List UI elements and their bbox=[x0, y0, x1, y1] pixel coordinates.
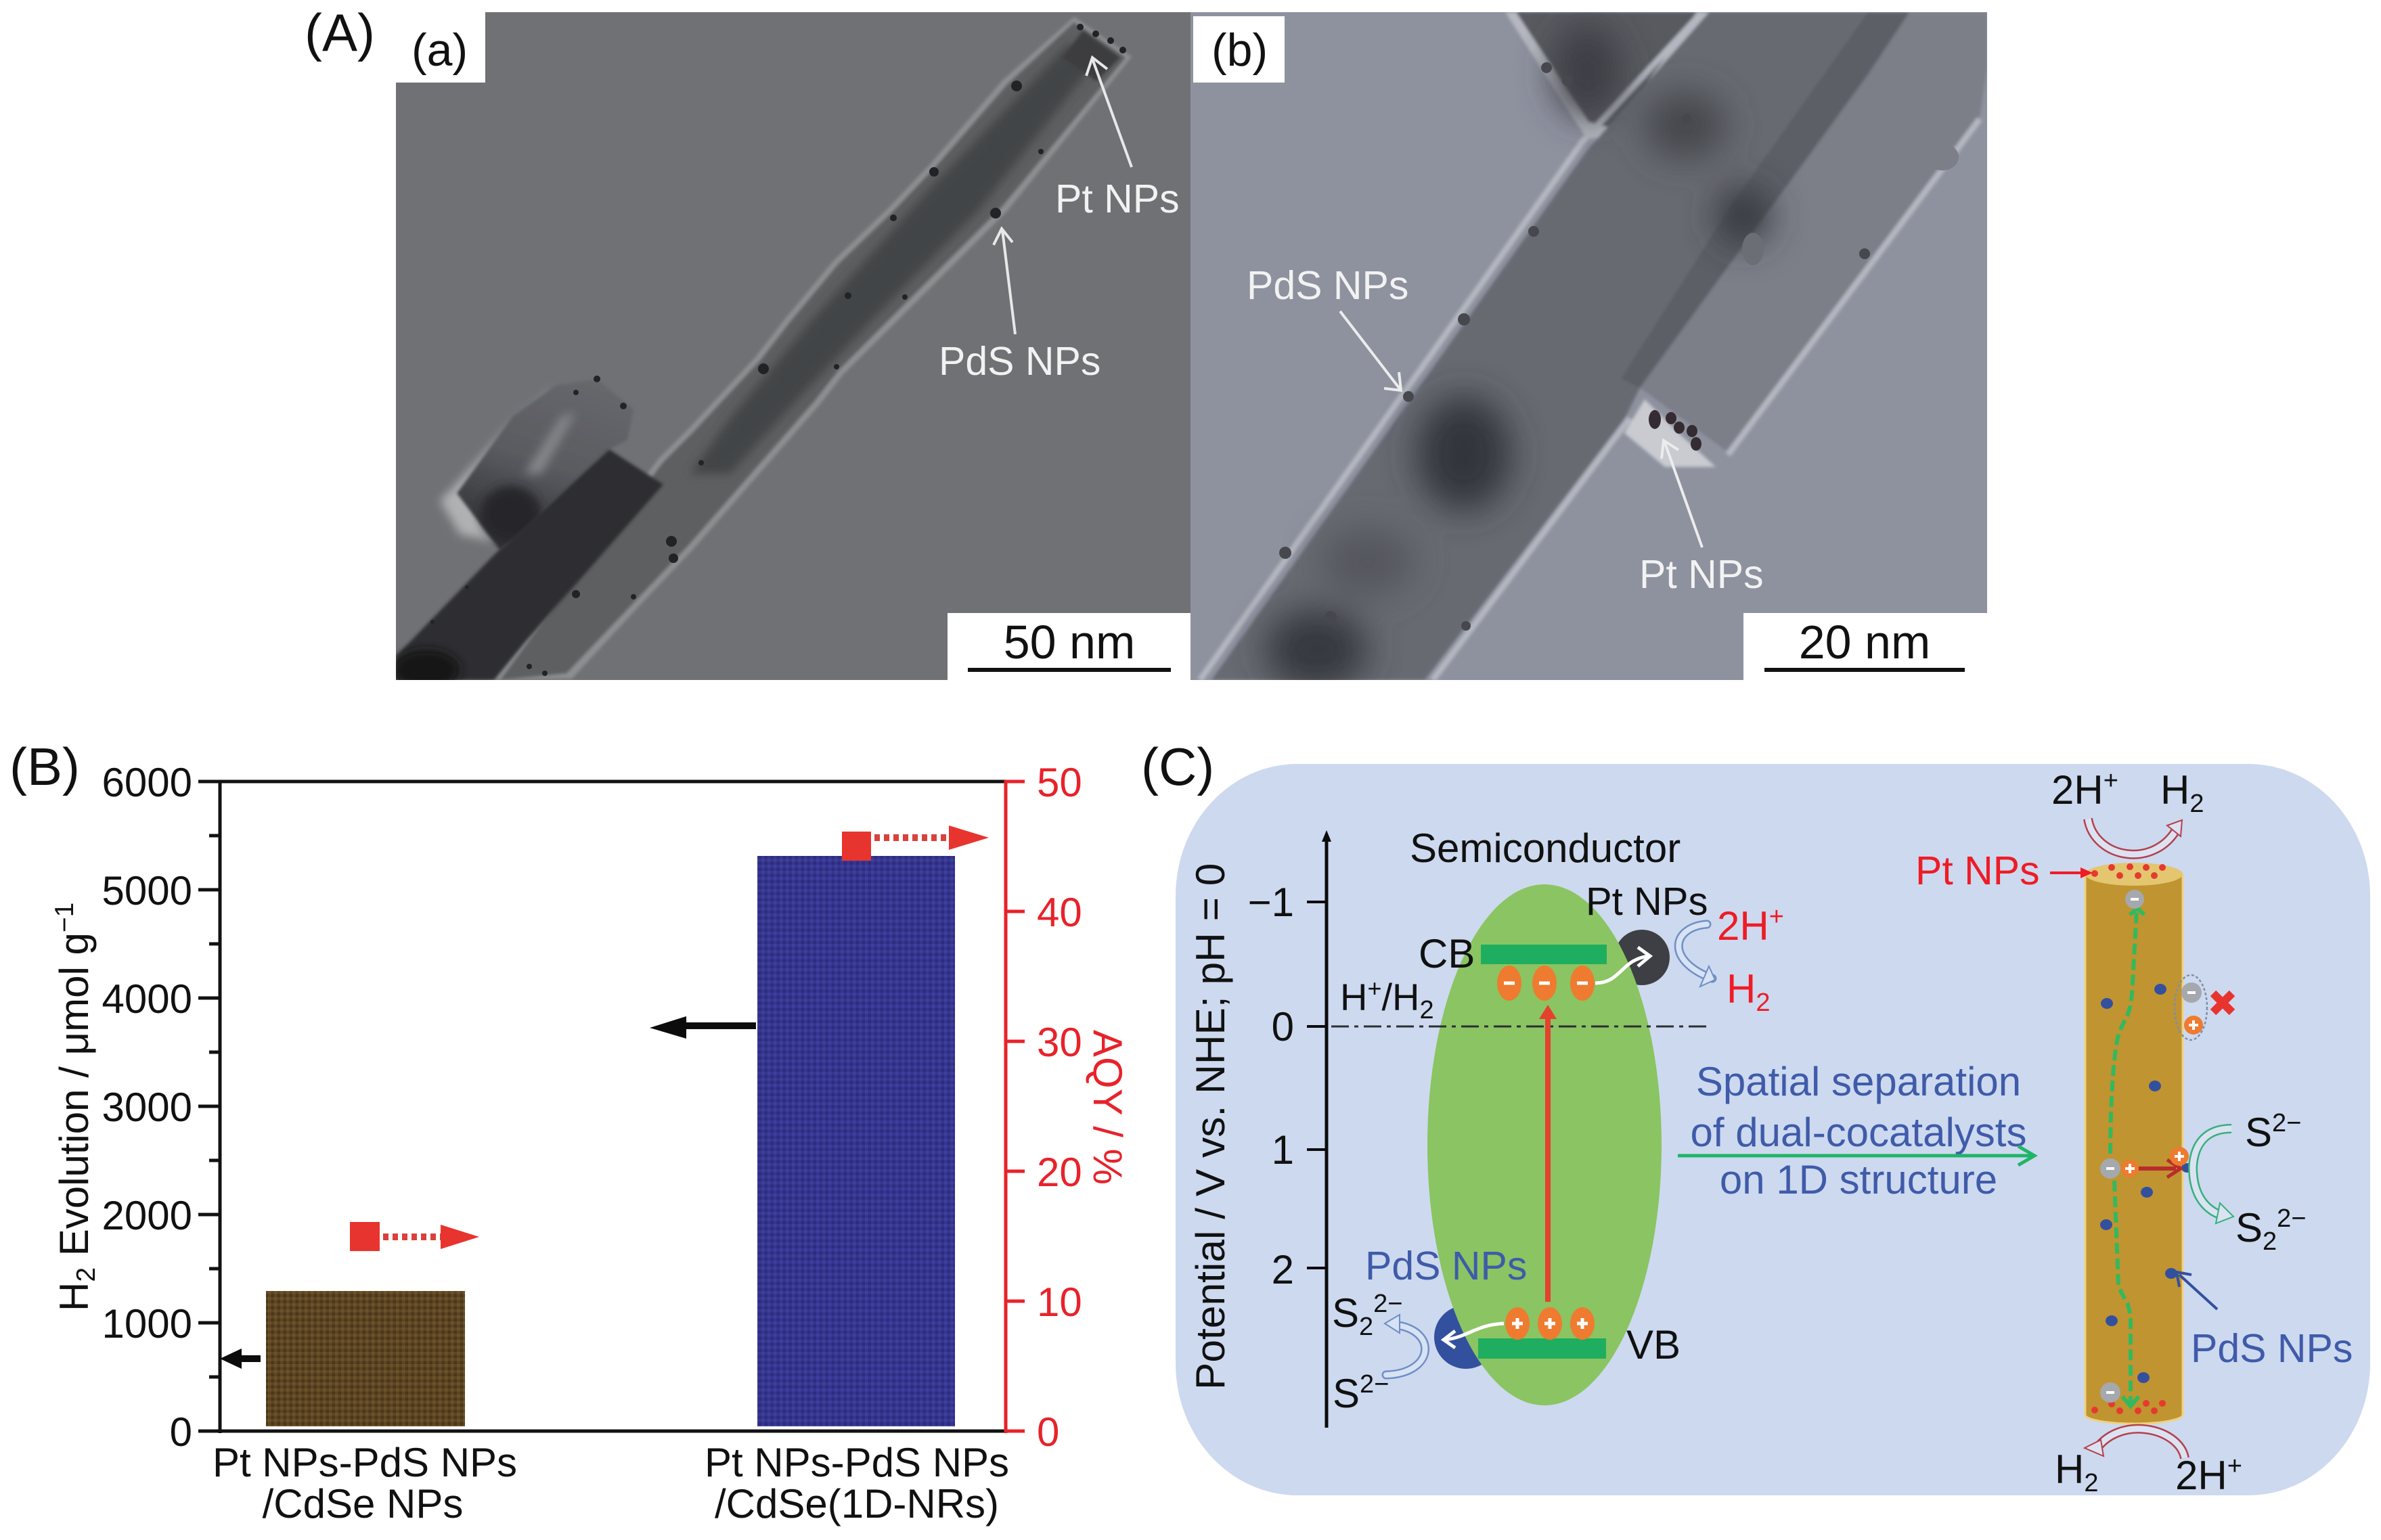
label: H2 red: H bbox=[1727, 966, 1756, 1012]
recombination ring bbox=[2175, 975, 2207, 1040]
label: S2- right: 2− bbox=[2272, 1109, 2301, 1137]
reaction arrows sulfide bbox=[2193, 1129, 2233, 1223]
panel label: (C): (C) bbox=[1141, 737, 1214, 796]
annotation: PdS NPs: PdS NPs bbox=[1247, 263, 1408, 308]
label: 2H+ red: 2H bbox=[1717, 903, 1769, 949]
label: S2 2- right: 2− bbox=[2277, 1204, 2307, 1233]
scale bar 50 nm: 50 nm bbox=[1004, 616, 1135, 669]
potential axis bbox=[1248, 830, 1331, 1428]
annotation: Pt NPs arrow bbox=[1662, 440, 1702, 547]
label: Pt NPs red: Pt NPs bbox=[1915, 848, 2040, 893]
label: H+/H2: 2 bbox=[1419, 996, 1434, 1024]
electron path down bbox=[2114, 1181, 2139, 1406]
Pt cluster bbox=[1649, 410, 1701, 451]
left tick labels: 0 bbox=[170, 1409, 192, 1455]
label: H+/H2: + bbox=[1367, 974, 1381, 1002]
electron path up bbox=[2110, 908, 2144, 1154]
label: Pt NPs: Pt NPs bbox=[1586, 880, 1708, 924]
label: H2 red: 2 bbox=[1756, 989, 1770, 1017]
left tick labels: 6000 bbox=[102, 760, 192, 805]
left tick labels: 1000 bbox=[102, 1301, 192, 1346]
nanorod bbox=[2085, 863, 2183, 1424]
label (b): (b) bbox=[1211, 24, 1268, 76]
PdS particles bbox=[2100, 984, 2194, 1383]
marker: AQY point 2 bbox=[842, 825, 989, 861]
label: H2 top: H bbox=[2160, 767, 2189, 813]
text: spatial separation: of dual-cocatalysts bbox=[1691, 1110, 2026, 1155]
label: S2 2- right: 2 bbox=[2263, 1227, 2277, 1256]
text: spatial separation: Spatial separation bbox=[1696, 1059, 2021, 1104]
Pt particles bottom bbox=[2091, 1400, 2166, 1414]
right axis bbox=[1006, 780, 1025, 1433]
bar: Pt NPs-PdS NPs/CdSe(1D-NRs) bbox=[757, 856, 955, 1426]
Pt cocatalyst bbox=[1614, 930, 1670, 985]
label: S2 2-: 2− bbox=[1373, 1290, 1402, 1318]
potential axis: 2 bbox=[1272, 1247, 1294, 1292]
label: H2 bottom: 2 bbox=[2084, 1469, 2098, 1497]
label: PdS NPs right: PdS NPs bbox=[2191, 1326, 2353, 1371]
text: spatial separation: on 1D structure bbox=[1720, 1157, 1997, 1202]
reaction arrows top bbox=[2088, 819, 2182, 855]
category label 2: /CdSe(1D-NRs) bbox=[715, 1481, 999, 1526]
panel: mechanism schematic bbox=[1176, 764, 2370, 1498]
arrow: left pointer large bbox=[650, 1016, 756, 1039]
label: 2H+ top: + bbox=[2104, 767, 2118, 795]
arrow: left pointer small bbox=[220, 1349, 261, 1369]
arrow: green transition bbox=[1678, 1146, 2034, 1165]
label: H2 bottom: H bbox=[2055, 1447, 2084, 1492]
y axis title right: AQY / % bbox=[1085, 1030, 1130, 1185]
panel: TEM image (b) bbox=[1190, 12, 1987, 690]
panel label: (A): (A) bbox=[305, 3, 375, 62]
bar: Pt NPs-PdS NPs/CdSe NPs bbox=[266, 1291, 465, 1426]
holes bbox=[1505, 1307, 1595, 1340]
label: VB: VB bbox=[1626, 1322, 1681, 1367]
panel: bar chart bbox=[50, 760, 1130, 1526]
electrons bbox=[1497, 966, 1595, 1001]
title: Semiconductor: Semiconductor bbox=[1410, 825, 1681, 871]
label: H+/H2: /H bbox=[1381, 976, 1419, 1018]
reaction arrows bottom bbox=[2085, 1429, 2185, 1458]
arrow: Pt NPs pointer bbox=[2050, 867, 2093, 878]
label: 2H+ top: 2H bbox=[2051, 767, 2104, 813]
left tick labels: 5000 bbox=[102, 868, 192, 913]
reaction arrow: S2- to S2 2- bbox=[1385, 1315, 1425, 1375]
excitation arrow bbox=[1539, 1005, 1557, 1302]
icon: red cross bbox=[2213, 993, 2232, 1012]
right tick labels: 20 bbox=[1037, 1150, 1082, 1195]
left axis bbox=[198, 780, 1006, 1433]
conduction band bbox=[1481, 945, 1607, 964]
category label 2 bbox=[705, 1440, 1009, 1526]
label: S2-: 2− bbox=[1360, 1370, 1389, 1399]
label: S2 2-: 2 bbox=[1359, 1313, 1373, 1341]
label: 2H+ bottom: 2H bbox=[2175, 1453, 2227, 1498]
right tick labels: 40 bbox=[1037, 890, 1082, 935]
right tick labels: 30 bbox=[1037, 1020, 1082, 1065]
panel label: (B): (B) bbox=[9, 737, 80, 796]
label (a) bbox=[396, 12, 485, 83]
annotation: PdS NPs arrow bbox=[994, 229, 1015, 334]
axis title: Potential / V vs. NHE; pH = 0 bbox=[1187, 863, 1233, 1390]
nanoparticles on rods bbox=[430, 24, 1126, 676]
panel background bbox=[1176, 764, 2370, 1495]
annotation: Pt NPs: Pt NPs bbox=[1055, 177, 1180, 221]
category label 1: Pt NPs-PdS NPs bbox=[213, 1440, 517, 1485]
label (b) bbox=[1193, 16, 1285, 83]
right tick labels: 0 bbox=[1037, 1409, 1059, 1455]
y axis title left: Evolution / μmol g bbox=[51, 932, 97, 1267]
dash-dot reference line bbox=[1331, 1026, 1706, 1027]
potential axis: 1 bbox=[1272, 1127, 1294, 1173]
label: 2H+ red: + bbox=[1769, 903, 1784, 931]
left tick labels: 4000 bbox=[102, 976, 192, 1022]
y axis title left: H bbox=[51, 1282, 97, 1311]
annotation: PdS NPs: PdS NPs bbox=[939, 339, 1100, 384]
panel: TEM image (a) bbox=[393, 12, 1190, 690]
arrow: hole migration bbox=[2139, 1160, 2181, 1177]
Pt particles top bbox=[2091, 863, 2166, 879]
charge carriers: holes bbox=[2121, 1016, 2203, 1177]
category label 2: Pt NPs-PdS NPs bbox=[705, 1440, 1009, 1485]
left tick labels bbox=[102, 760, 192, 1455]
label: S2 2-: S bbox=[1332, 1290, 1359, 1336]
label: S2-: S bbox=[1333, 1371, 1360, 1416]
label: S2 2- right: S bbox=[2235, 1205, 2263, 1250]
label: H+/H2: H bbox=[1340, 976, 1367, 1018]
scale bar 50 nm bbox=[948, 613, 1190, 680]
semiconductor ellipse bbox=[1427, 884, 1662, 1405]
charge carriers: electrons bbox=[2100, 890, 2202, 1403]
label: S2- right: S bbox=[2245, 1110, 2272, 1155]
category label 1: /CdSe NPs bbox=[263, 1481, 463, 1526]
annotation: PdS NPs arrow bbox=[1340, 311, 1401, 390]
reaction arrow: 2H+ to H2 bbox=[1678, 924, 1715, 987]
annotation: Pt NPs arrow bbox=[1086, 58, 1132, 167]
scale bar 20 nm: 20 nm bbox=[1799, 616, 1930, 669]
right tick labels bbox=[1037, 760, 1082, 1455]
label (a): (a) bbox=[411, 24, 468, 76]
arrow: electron to Pt bbox=[1595, 947, 1650, 983]
arrow: PdS NPs pointer bbox=[2177, 1272, 2217, 1309]
potential axis: 0 bbox=[1272, 1004, 1294, 1049]
y axis title left: 2 bbox=[72, 1267, 101, 1282]
PdS cocatalyst bbox=[1434, 1305, 1498, 1369]
left tick labels: 3000 bbox=[102, 1085, 192, 1130]
right tick labels: 50 bbox=[1037, 760, 1082, 805]
annotation: Pt NPs: Pt NPs bbox=[1639, 552, 1764, 597]
category label 1 bbox=[213, 1440, 517, 1526]
scale bar 20 nm bbox=[1743, 613, 1987, 680]
nanoparticles on rods bbox=[1279, 62, 1870, 631]
label: H2 top: 2 bbox=[2189, 790, 2204, 818]
potential axis: −1 bbox=[1248, 880, 1294, 925]
right tick labels: 10 bbox=[1037, 1279, 1082, 1325]
label: PdS NPs blue: PdS NPs bbox=[1365, 1244, 1527, 1288]
label: CB: CB bbox=[1419, 931, 1475, 976]
y axis title left: −1 bbox=[50, 903, 79, 932]
label: 2H+ bottom: + bbox=[2227, 1452, 2242, 1480]
arrow: hole to PdS bbox=[1444, 1323, 1504, 1348]
valence band bbox=[1478, 1338, 1606, 1359]
text: spatial separation bbox=[1691, 1059, 2026, 1202]
marker: AQY point 1 bbox=[350, 1222, 479, 1251]
left tick labels: 2000 bbox=[102, 1193, 192, 1238]
